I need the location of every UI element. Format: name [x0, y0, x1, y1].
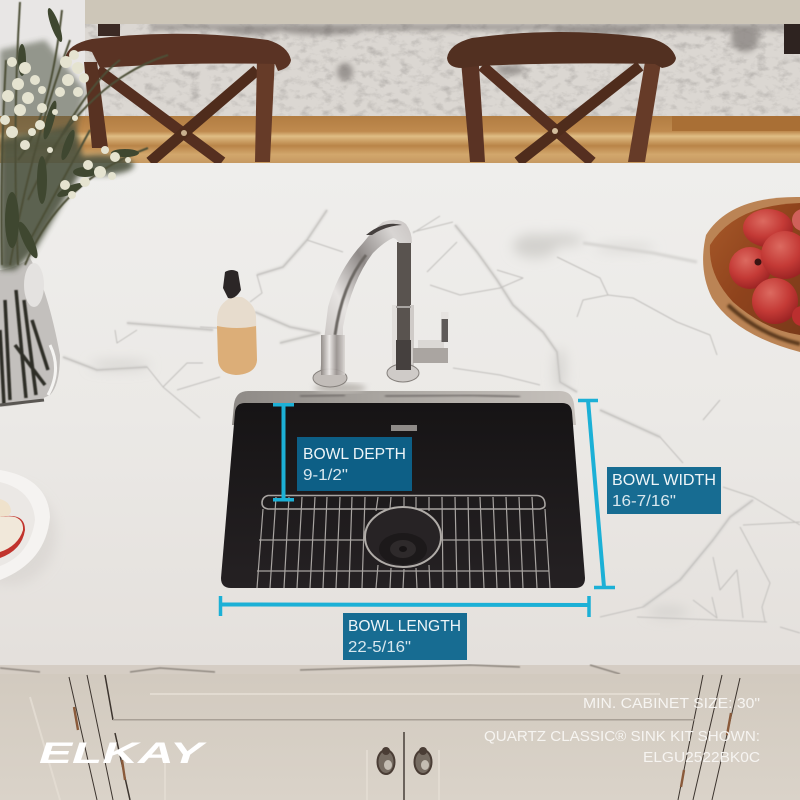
drain: [365, 507, 441, 567]
kit note: [484, 728, 760, 766]
countertop: [0, 163, 800, 665]
faucet: [313, 220, 448, 393]
apples: [743, 209, 793, 247]
callout: bowl depth: BOWL DEPTH: [303, 446, 406, 463]
callout: bowl width: [607, 467, 721, 514]
soap bottle: [217, 270, 257, 375]
callout: bowl depth: [297, 437, 412, 491]
dimension line: bowl width: [578, 400, 615, 588]
callout: bowl length: [343, 613, 467, 660]
logo: Elkay: ELKAY: [39, 737, 208, 770]
callout: bowl width: BOWL WIDTH: [612, 472, 716, 489]
overflow plate: [391, 425, 417, 431]
cabinet size note: MIN. CABINET SIZE: 30": [583, 695, 760, 712]
background room: rug and floor: [0, 0, 800, 164]
sink basin: [221, 403, 585, 588]
plate with apple slices: [0, 470, 56, 585]
callout: bowl depth: 9-1/2": [303, 467, 348, 484]
wire grid: [257, 496, 550, 588]
chair: right: [447, 32, 676, 162]
callout: bowl length: 22-5/16": [348, 639, 411, 656]
faucet spout: [320, 220, 412, 373]
faucet riser: [397, 242, 411, 374]
dimension line: bowl length: [220, 596, 589, 617]
kit note: ELGU2522BK0C: [643, 749, 760, 766]
callout: bowl width: 16-7/16": [612, 493, 676, 510]
counter front edge: [0, 665, 800, 674]
dimension line: bowl depth: [273, 403, 294, 502]
callout: bowl length: BOWL LENGTH: [348, 618, 461, 635]
sink rim: [232, 391, 576, 425]
sink: [221, 391, 585, 588]
fruit bowl with apples: [703, 197, 800, 352]
faucet handle: [413, 348, 448, 363]
cabinet: [0, 674, 800, 800]
bench in the background: [85, 0, 800, 24]
vase: [0, 258, 60, 407]
kit note: QUARTZ CLASSIC® SINK KIT SHOWN:: [484, 728, 760, 745]
chair: left: [65, 34, 291, 162]
plant: [0, 2, 168, 270]
cabinet handles: [378, 747, 432, 774]
